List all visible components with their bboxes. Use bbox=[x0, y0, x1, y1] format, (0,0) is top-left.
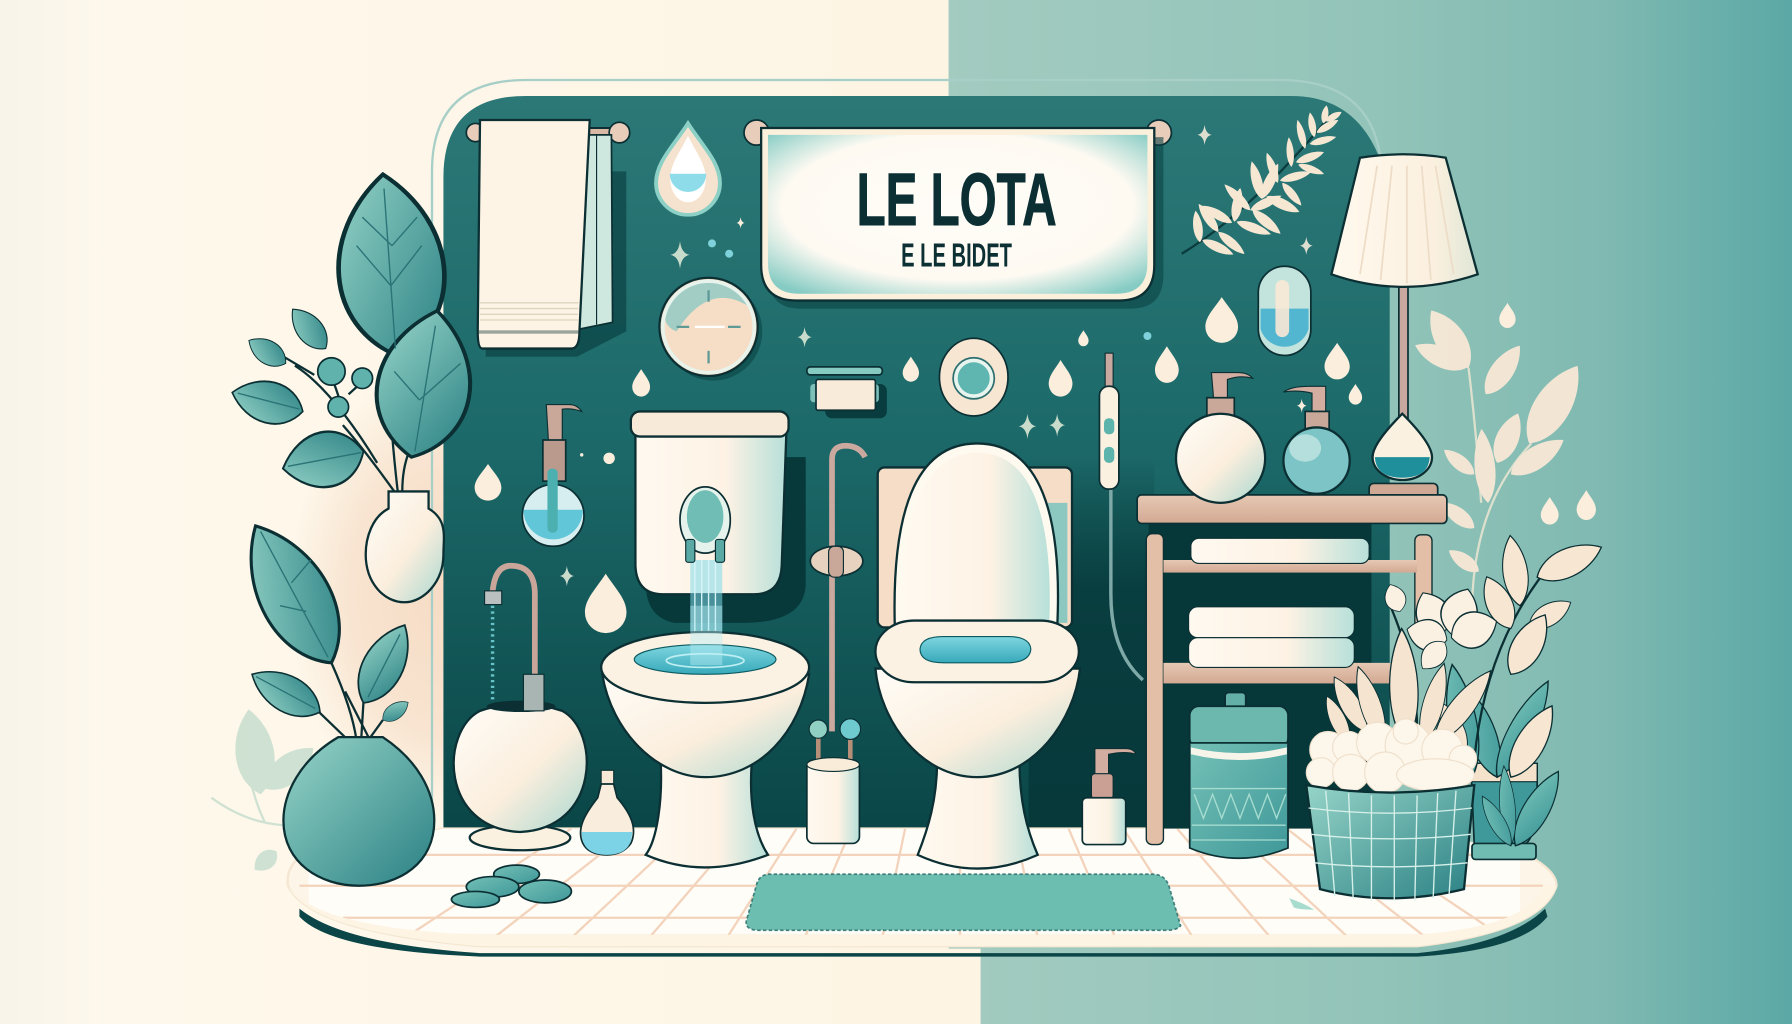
background: cream left side bbox=[0, 0, 983, 1024]
spout bbox=[680, 487, 730, 562]
panel outline frame bbox=[432, 80, 1382, 829]
flowers bbox=[1381, 581, 1503, 731]
raised lid bbox=[895, 443, 1058, 629]
peach wall glow bbox=[289, 366, 598, 823]
subtitle: E LE BIDET bbox=[901, 237, 1012, 274]
tank behind bbox=[878, 467, 1072, 627]
berries bbox=[318, 358, 373, 417]
pale leaves bbox=[1432, 534, 1607, 784]
plant pot bbox=[1471, 763, 1537, 846]
shelf legs bbox=[1146, 534, 1432, 845]
toilet paper holder bbox=[807, 367, 887, 418]
front pale fronds bbox=[1320, 628, 1500, 750]
bowl bbox=[602, 674, 809, 777]
icon: water drop badge bbox=[656, 123, 720, 215]
glass flask bbox=[581, 770, 634, 855]
water stream bbox=[690, 560, 722, 669]
towel rack with towel bbox=[466, 120, 630, 357]
wall shower rod with holder bbox=[807, 446, 865, 843]
shelf unit bbox=[1137, 495, 1447, 845]
faded background leaves bbox=[211, 707, 322, 877]
bidet handset and hose bbox=[1099, 353, 1143, 680]
falling water bbox=[491, 606, 494, 699]
large soap bottle bbox=[1176, 373, 1265, 503]
leafy branch bbox=[1182, 105, 1343, 259]
water drops on wall bbox=[475, 125, 1596, 633]
teal blades bbox=[1438, 662, 1569, 852]
wall clock bbox=[659, 278, 762, 381]
towel shadow bbox=[486, 171, 626, 357]
capsule dispenser bbox=[1258, 266, 1311, 355]
teal canister bbox=[1190, 693, 1288, 858]
decorative pale plant bbox=[1411, 302, 1593, 606]
seat water bbox=[920, 637, 1031, 663]
bulb-shaped lota with pump bbox=[522, 405, 584, 546]
background: teal right side bbox=[949, 0, 1792, 1024]
tank bbox=[635, 434, 786, 594]
pot body bbox=[454, 704, 587, 832]
round flush button bbox=[939, 338, 1008, 416]
rim bbox=[601, 632, 809, 703]
tank shadow bbox=[646, 457, 806, 623]
leaves bbox=[227, 170, 483, 495]
tiled floor bbox=[286, 829, 1557, 949]
basket body bbox=[1306, 785, 1474, 898]
right toilet with bidet seat bbox=[875, 443, 1080, 869]
stems bbox=[318, 663, 383, 743]
dark teal wall panel bbox=[443, 96, 1390, 829]
upper left plant bbox=[227, 170, 483, 602]
brush holder bbox=[807, 719, 861, 843]
seat bbox=[875, 621, 1079, 682]
pedestal bbox=[646, 760, 768, 867]
towel front bbox=[478, 120, 590, 349]
floor smudge bbox=[1289, 898, 1314, 910]
table lamp bbox=[1331, 154, 1478, 501]
pebbles bbox=[451, 865, 571, 907]
middle boards bbox=[1163, 560, 1417, 573]
pedestal bbox=[918, 760, 1038, 869]
tank lid bbox=[631, 411, 789, 437]
upper vase bbox=[366, 491, 444, 602]
leaves bbox=[225, 509, 422, 728]
shelf top bbox=[1137, 495, 1447, 523]
title sign bbox=[761, 128, 1163, 309]
rod bbox=[466, 122, 630, 143]
faucet arm bbox=[493, 566, 535, 706]
bowl water bbox=[634, 645, 776, 674]
shelf dark backing bbox=[1149, 523, 1371, 829]
lower left plant bbox=[225, 509, 434, 886]
bath mat bbox=[746, 874, 1181, 930]
left toilet bbox=[601, 411, 809, 867]
cotton bbox=[1306, 719, 1477, 793]
leaf veins bbox=[238, 189, 461, 466]
sign mounting knobs bbox=[744, 120, 1171, 145]
folded towels bbox=[1189, 538, 1369, 667]
bowl bbox=[875, 669, 1080, 777]
basket with cotton bbox=[1306, 719, 1477, 901]
right potted plant bbox=[1320, 534, 1607, 859]
lamp pole bbox=[1399, 283, 1408, 421]
lamp shade bbox=[1331, 154, 1478, 287]
faucet in ceramic pot bbox=[454, 566, 587, 850]
floor shadow bbox=[299, 909, 1547, 957]
title: LE LOTA bbox=[857, 158, 1057, 241]
towel back folds bbox=[579, 135, 613, 329]
stems bbox=[283, 354, 409, 491]
teal vase bbox=[283, 737, 434, 886]
small soap bottle bbox=[1283, 386, 1350, 494]
pot base bbox=[470, 825, 570, 850]
darker shadow zone behind right toilet bbox=[1029, 457, 1154, 829]
small pump bottle bbox=[1082, 749, 1136, 845]
lamp base bbox=[1373, 414, 1432, 480]
